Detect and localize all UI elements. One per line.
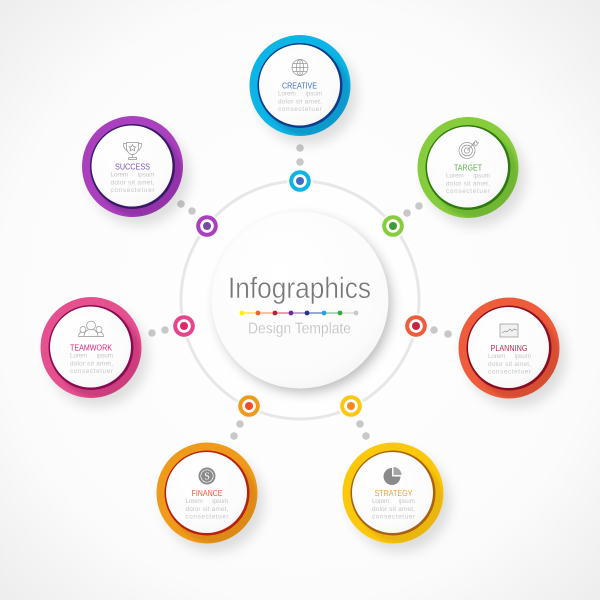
node: target <box>380 213 406 239</box>
text block: planning: Lorem ipsum <box>488 353 531 360</box>
text block: strategy: dolor sit amet, <box>372 506 415 513</box>
text block: target: consectetuer <box>446 188 491 195</box>
panel: finance <box>156 442 264 552</box>
heading: finance: FINANCE <box>192 488 223 498</box>
heading: strategy: STRATEGY <box>374 488 413 498</box>
text block: creative: consectetuer <box>278 106 323 113</box>
text block: teamwork <box>70 352 114 375</box>
text block: success: Lorem ipsum <box>110 172 154 178</box>
text block: teamwork: consectetuer <box>70 368 114 375</box>
text block: teamwork: Lorem ipsum <box>70 352 113 360</box>
text block: finance: consectetuer <box>186 514 229 520</box>
text block: planning <box>488 353 532 376</box>
text block: success: dolor sit amet, <box>110 180 155 186</box>
text block: planning: consectetuer <box>488 368 532 376</box>
panel: success <box>82 116 190 226</box>
text block: target <box>446 172 491 195</box>
icon: globe <box>292 60 308 76</box>
icon: trophy <box>124 142 142 160</box>
node: success <box>194 213 220 239</box>
panel: strategy <box>342 442 450 552</box>
central ring <box>181 181 419 419</box>
heading: target: TARGET <box>454 162 482 172</box>
text block: finance: dolor sit amet, <box>186 506 229 513</box>
icon: pie chart <box>384 467 402 485</box>
icon: target <box>459 140 478 158</box>
node: strategy <box>338 393 364 419</box>
node: creative <box>287 168 313 194</box>
heading: success: SUCCESS <box>115 161 150 171</box>
icon: people <box>78 321 104 336</box>
title: Infographics <box>228 272 371 305</box>
icon: line chart <box>500 324 518 337</box>
text block: target: dolor sit amet, <box>446 180 490 188</box>
subtitle: Design Template <box>248 320 351 337</box>
center disc with title <box>212 212 391 392</box>
text block: finance <box>186 498 229 520</box>
text block: success <box>110 172 155 194</box>
node: planning <box>403 313 429 339</box>
text block: planning: dolor sit amet, <box>488 361 531 368</box>
icon: coin: S <box>204 472 210 482</box>
heading: planning: PLANNING <box>490 343 528 353</box>
text block: creative <box>278 90 323 113</box>
text block: strategy: consectetuer <box>372 514 416 520</box>
node: finance <box>236 393 262 419</box>
connector dots <box>148 144 452 440</box>
panel: target <box>418 117 525 226</box>
text block: finance: Lorem ipsum <box>186 498 228 505</box>
text block: creative: Lorem ipsum <box>278 90 322 98</box>
heading: creative: CREATIVE <box>282 80 317 90</box>
text block: target: Lorem ipsum <box>446 172 490 180</box>
panel: teamwork <box>40 297 148 406</box>
heading: teamwork: TEAMWORK <box>70 342 112 352</box>
text block: creative: dolor sit amet, <box>278 98 322 106</box>
node: teamwork <box>171 313 197 339</box>
text block: strategy: Lorem ipsum <box>372 498 415 505</box>
text block: success: consectetuer <box>110 187 155 194</box>
text block: strategy <box>372 498 416 520</box>
panel: creative <box>250 35 357 144</box>
panel: planning <box>458 298 566 407</box>
colored timeline <box>240 311 358 315</box>
text block: teamwork: dolor sit amet, <box>70 360 113 368</box>
